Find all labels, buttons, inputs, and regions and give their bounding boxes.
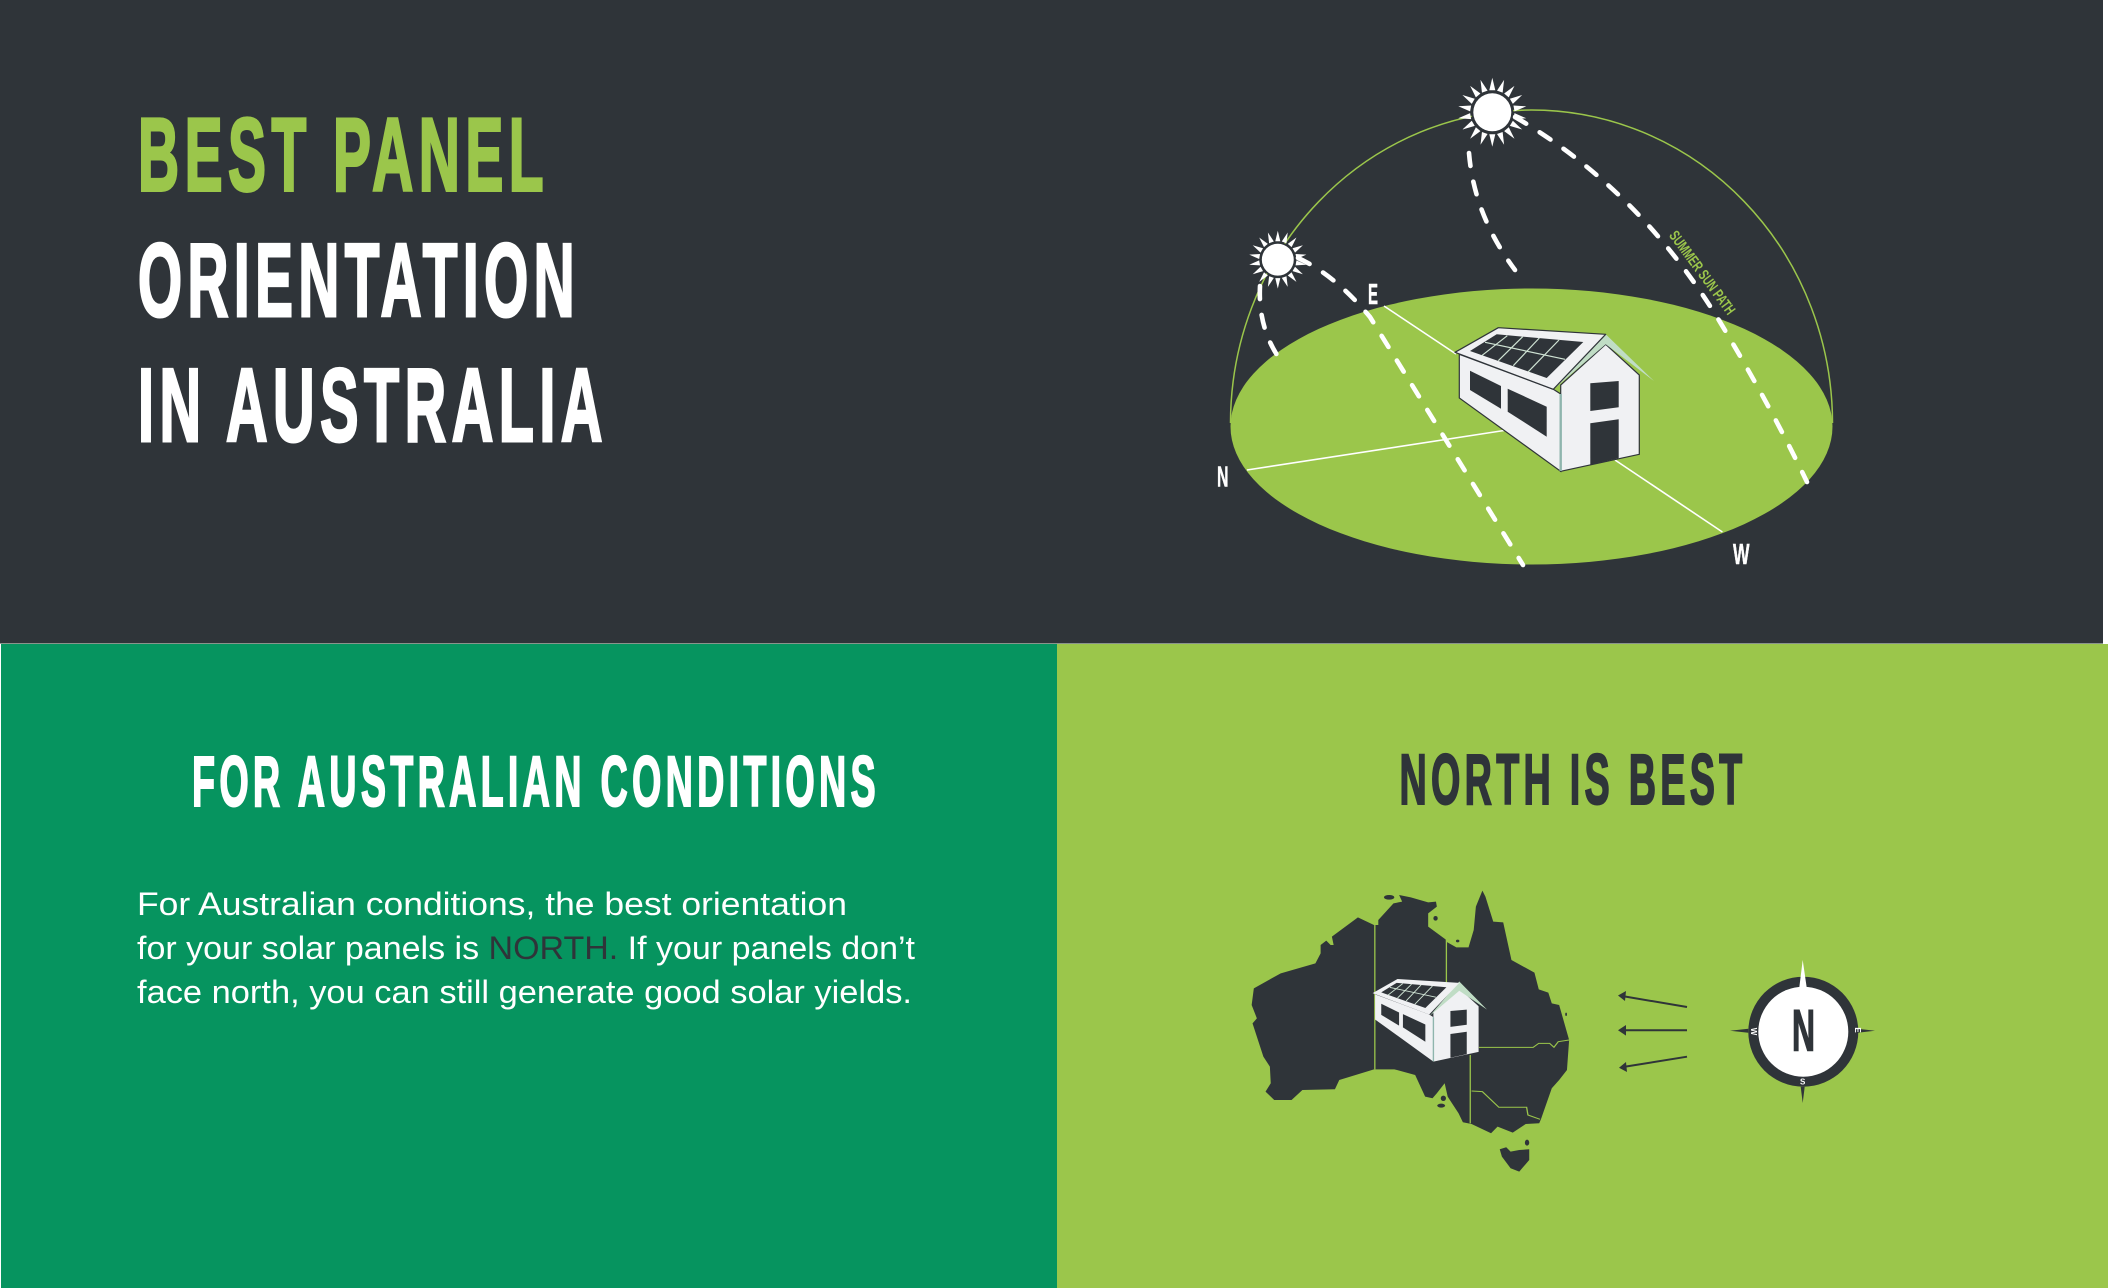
direction label N: N	[1217, 462, 1228, 494]
arrows pointing to map	[1618, 991, 1687, 1072]
arrow middle	[1618, 1025, 1687, 1036]
icon: house on map	[1373, 979, 1487, 1062]
title	[138, 98, 608, 464]
compass letter E: E	[1853, 1027, 1862, 1033]
icon: high sun	[1458, 78, 1527, 147]
direction label E: E	[1368, 279, 1378, 311]
north needle	[1799, 960, 1807, 988]
green ground ellipse	[1230, 288, 1832, 564]
title line: in australia: IN AUSTRALIA	[138, 348, 608, 464]
compass letter S: S	[1800, 1078, 1806, 1086]
arrow bottom	[1619, 1057, 1687, 1072]
icon: low sun	[1249, 231, 1307, 289]
compass ring	[1748, 977, 1858, 1087]
arrow top	[1618, 991, 1687, 1007]
title line: best panel: BEST PANEL	[138, 98, 549, 214]
south needle	[1801, 1087, 1805, 1103]
summer sun path label: SUMMER SUN PATH	[1665, 228, 1738, 318]
sun path diagram	[1217, 78, 1832, 571]
map of australia	[1252, 891, 1569, 1172]
panel: north is best	[1057, 644, 2108, 1288]
body line 1: For Australian conditions, the best orientation	[137, 886, 847, 922]
icon: house with solar panels	[1455, 328, 1654, 471]
body text	[137, 886, 915, 1010]
body line 2: for your solar panels is NORTH. If your panels don’t	[137, 930, 915, 966]
state borders	[1375, 925, 1569, 1123]
compass letter W: W	[1749, 1028, 1758, 1036]
heading: north is best: NORTH IS BEST	[1400, 741, 1746, 820]
heading: for australian conditions: FOR AUSTRALIAN CONDITIONS	[192, 743, 880, 822]
dome arc	[1230, 110, 1832, 423]
compass lines on the ground	[1247, 306, 1722, 532]
panel: dark header	[0, 0, 2103, 643]
mainland and islands	[1252, 891, 1569, 1172]
body line 3: face north, you can still generate good solar yields.	[137, 974, 912, 1010]
direction label W: W	[1733, 539, 1750, 571]
compass letter N: N	[1792, 998, 1815, 1064]
dashed sun paths	[1260, 117, 1807, 565]
west needle	[1730, 1029, 1748, 1033]
compass	[1730, 960, 1875, 1103]
compass face	[1758, 987, 1848, 1077]
panel: australian conditions	[1, 644, 1057, 1288]
east needle	[1858, 1029, 1875, 1033]
title line: orientation: ORIENTATION	[138, 223, 580, 339]
